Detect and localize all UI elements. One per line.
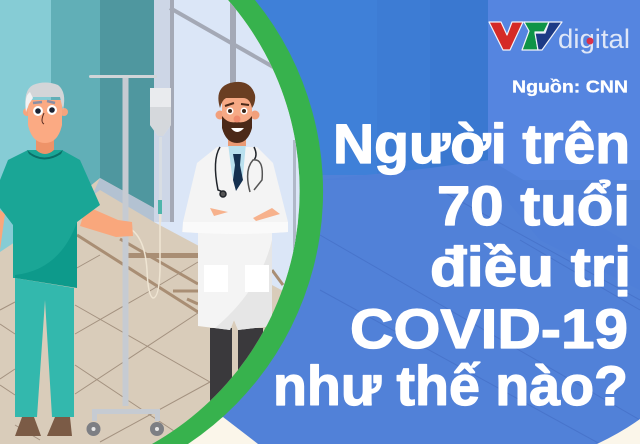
source credit: Nguồn: CNN bbox=[512, 76, 628, 96]
patient shirt bbox=[0, 150, 100, 278]
floor tiles and stair rails bbox=[0, 235, 283, 442]
logo mark bbox=[489, 22, 562, 50]
patient bbox=[0, 82, 133, 436]
IV stand bbox=[86, 75, 164, 436]
title: Người trên bbox=[333, 112, 630, 175]
patient trousers bbox=[15, 278, 74, 417]
title: như thế nào? bbox=[273, 354, 628, 417]
doctor shirt and tie bbox=[228, 143, 246, 191]
patient arm bbox=[80, 210, 133, 237]
logo: VTV digital bbox=[489, 22, 630, 54]
IV bag and tube bbox=[132, 88, 171, 298]
stethoscope bbox=[215, 147, 262, 197]
doctor pockets bbox=[204, 265, 269, 292]
doctor trousers bbox=[210, 328, 263, 401]
window bbox=[154, 0, 300, 300]
logo dot bbox=[586, 38, 594, 44]
patient neck and head bbox=[23, 82, 68, 154]
logo wordmark: digital bbox=[558, 24, 630, 54]
title: 70 tuổi bbox=[437, 174, 630, 237]
title: điều trị bbox=[430, 235, 631, 298]
back wall bbox=[0, 0, 154, 252]
doctor coat bbox=[182, 147, 288, 330]
green arc bbox=[0, 0, 323, 444]
doctor crossed arms bbox=[273, 232, 285, 233]
title: COVID-19 bbox=[350, 297, 628, 360]
title bbox=[273, 112, 631, 417]
patient shoes bbox=[15, 417, 72, 436]
doctor head bbox=[216, 82, 260, 146]
doctor bbox=[182, 82, 288, 401]
panel: hospital illustration bbox=[0, 0, 300, 444]
